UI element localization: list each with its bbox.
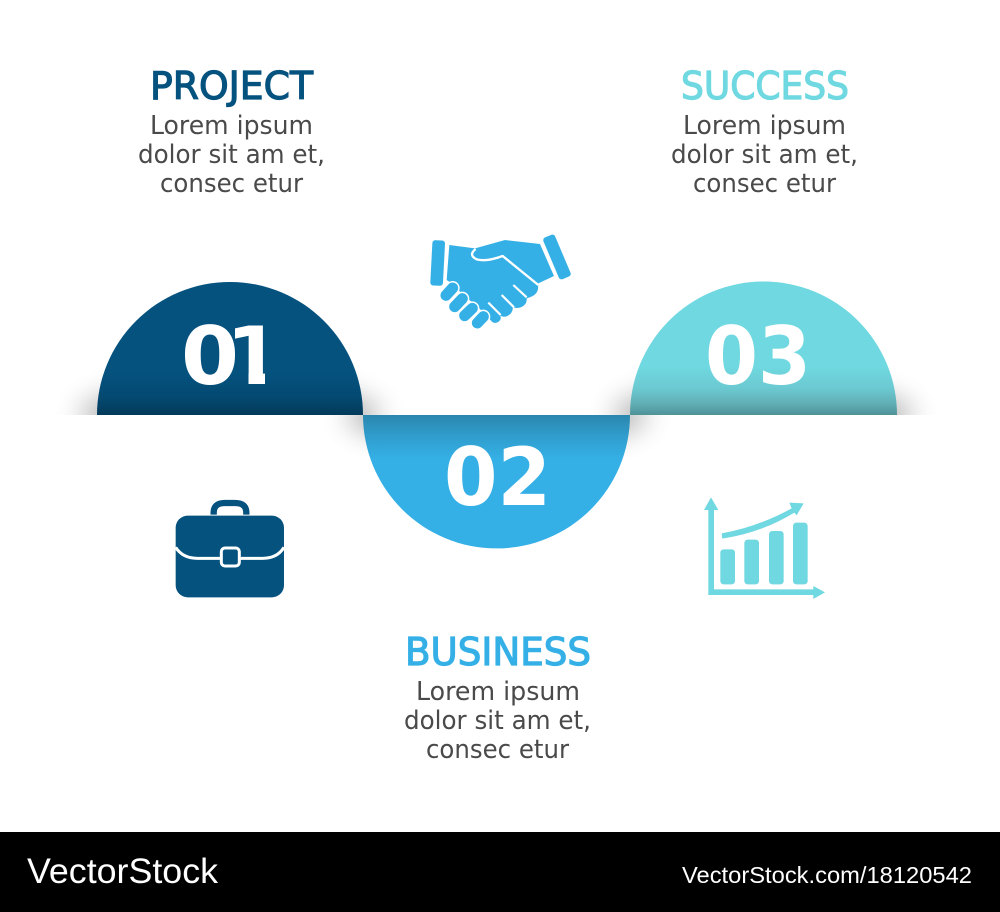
heading: business: BUSINESS <box>405 630 591 675</box>
footer bar <box>0 832 1000 912</box>
heading: success: SUCCESS <box>681 64 849 109</box>
text block: business description: consec etur <box>426 735 569 765</box>
text block: business description <box>404 677 591 765</box>
panel: step 03 semicircle <box>630 282 897 415</box>
text block: project description <box>138 111 325 199</box>
panel: success text <box>671 64 858 199</box>
panel: step 02 semicircle <box>363 415 630 548</box>
number 01 <box>185 324 265 385</box>
text block: success description: consec etur <box>693 169 836 199</box>
heading: project: PROJECT <box>150 64 314 109</box>
text block: success description: Lorem ipsum <box>683 111 846 141</box>
panel: business text <box>404 630 591 765</box>
text block: project description: Lorem ipsum <box>150 111 313 141</box>
text block: business description: Lorem ipsum <box>416 677 580 707</box>
watermark logo text: VectorStock <box>27 852 219 891</box>
number 03: 03 <box>705 310 811 403</box>
panel: project text <box>138 64 325 199</box>
image id text: VectorStock.com/18120542 <box>682 862 972 888</box>
panel: step 01 semicircle <box>97 282 363 415</box>
icon: growth chart <box>704 497 825 599</box>
shadows behind semicircles <box>80 383 913 447</box>
text block: success description <box>671 111 858 199</box>
icon: briefcase <box>176 503 284 597</box>
text block: project description: dolor sit am et, <box>138 140 325 170</box>
number 01: 1 <box>226 310 282 403</box>
text block: success description: dolor sit am et, <box>671 140 858 170</box>
text block: business description: dolor sit am et, <box>404 706 591 736</box>
number 02: 02 <box>444 431 551 524</box>
number 01: 0 <box>181 310 239 403</box>
text block: project description: consec etur <box>160 169 303 199</box>
icon: handshake <box>430 234 572 323</box>
